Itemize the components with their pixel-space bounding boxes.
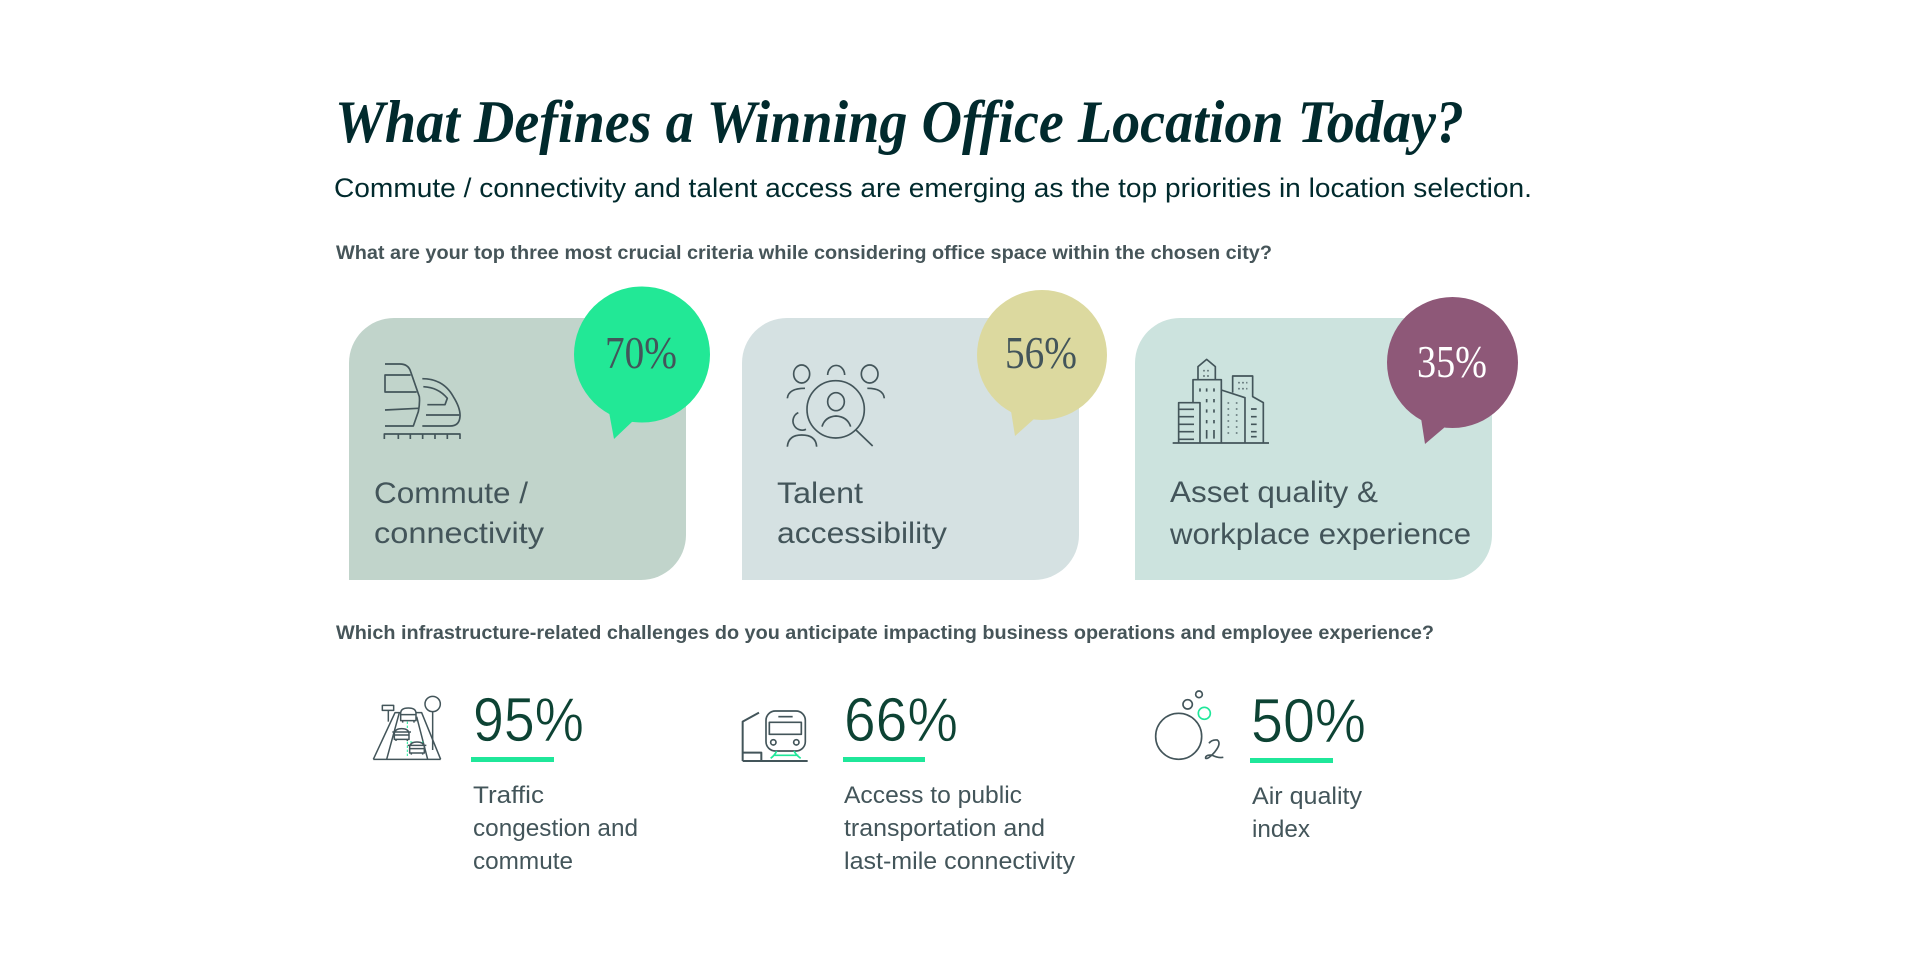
accent bar <box>843 757 925 762</box>
subtitle: Commute / connectivity and talent access are emerging as the top priorities in location selection. <box>334 173 1532 203</box>
stat: public transportation <box>743 686 1075 875</box>
description: Air quality <box>1252 783 1362 810</box>
speech bubble: 70% <box>574 286 710 439</box>
icon: talent search <box>787 365 884 447</box>
description: Access to public <box>844 782 1022 809</box>
description: transportation and <box>844 815 1045 842</box>
accent bar <box>1250 758 1333 763</box>
panel: talent accessibility <box>742 290 1107 580</box>
label: talent accessibility: Talent <box>777 477 864 510</box>
label: commute / connectivity: connectivity <box>374 517 544 550</box>
icon: trains <box>384 364 460 439</box>
question: office space criteria: What are your top three most crucial criteria while considering office space within the chosen city? <box>336 243 1272 264</box>
panel: commute / connectivity <box>349 286 710 580</box>
speech bubble: 35% <box>1387 297 1518 444</box>
description: Traffic <box>473 782 544 809</box>
speech bubble: 70%: 70% <box>605 328 677 378</box>
description: last-mile connectivity <box>844 848 1075 875</box>
stat: traffic congestion <box>373 686 638 875</box>
icon: oxygen bubbles <box>1156 691 1223 759</box>
label: asset quality and workplace experience: Asset quality & <box>1170 476 1378 509</box>
value: 50%: 50% <box>1251 687 1366 756</box>
label: talent accessibility: accessibility <box>777 517 947 550</box>
icon: buildings <box>1173 359 1269 443</box>
description: commute <box>473 848 573 875</box>
card background <box>742 318 1079 580</box>
speech bubble: 56%: 56% <box>1005 328 1077 378</box>
title: What Defines a Winning Office Location Today? <box>335 89 1464 155</box>
icon: metro train <box>743 711 808 761</box>
value: 95%: 95% <box>473 686 584 755</box>
stat: air quality <box>1156 687 1366 843</box>
icon: road with traffic <box>373 696 441 759</box>
speech bubble: 56% <box>977 290 1107 436</box>
panel: asset quality <box>1135 297 1518 580</box>
description: congestion and <box>473 815 638 842</box>
label: commute / connectivity: Commute / <box>374 477 529 510</box>
question: infrastructure challenges: Which infrastructure-related challenges do you anticipate impacting business operations and employee experience? <box>336 623 1434 644</box>
description: index <box>1252 816 1310 843</box>
label: asset quality and workplace experience: workplace experience <box>1169 518 1471 551</box>
card background <box>1135 318 1492 580</box>
speech bubble: 35%: 35% <box>1417 337 1487 387</box>
value: 66%: 66% <box>844 686 958 755</box>
accent bar <box>471 757 554 762</box>
card background <box>349 318 686 580</box>
